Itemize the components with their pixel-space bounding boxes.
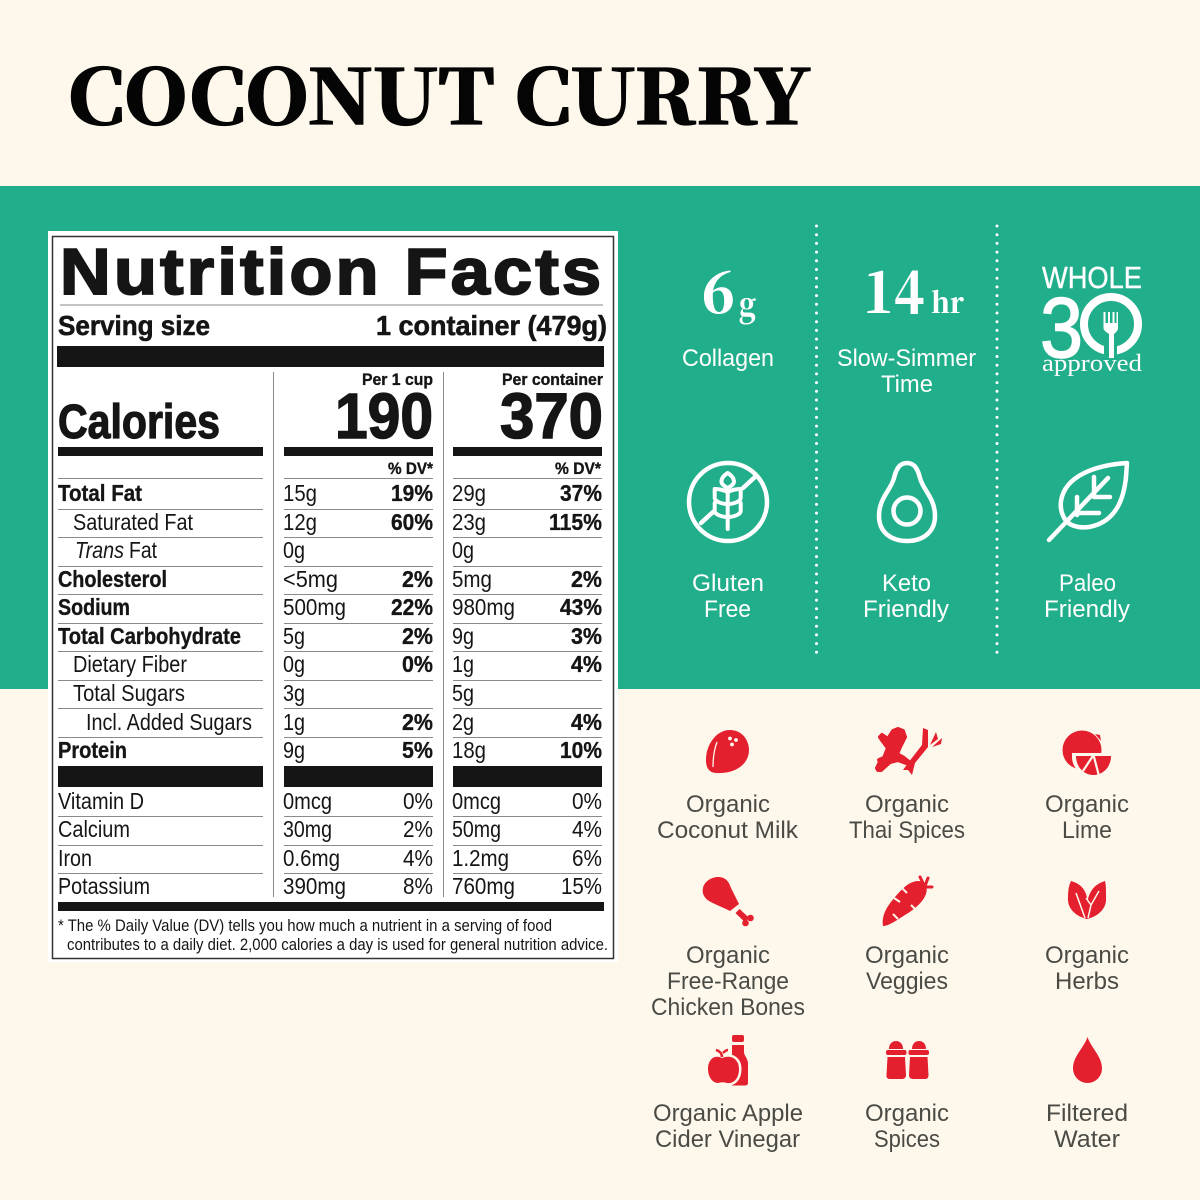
row: total carbohydrate: 9g: [452, 623, 474, 649]
heading: nutrition facts: Nutrition Facts: [60, 236, 601, 308]
calories row: Calories: [58, 396, 220, 449]
row: potassium: Potassium: [58, 873, 150, 899]
row: potassium: 760mg: [452, 873, 515, 899]
calories row: % DV*: [388, 459, 433, 478]
row: total sugars: 5g: [452, 680, 474, 706]
title: COCONUT CURRY: [68, 39, 811, 146]
keto friendly label: Friendly: [863, 596, 949, 623]
ingredient: herbs: Herbs: [1055, 968, 1119, 995]
row: potassium: 8%: [403, 873, 433, 899]
row: total fat: 19%: [391, 480, 433, 506]
row: cholesterol: [58, 566, 602, 592]
stat: 6g collagen: [682, 246, 774, 372]
row: total fat: 29g: [452, 480, 486, 506]
paleo friendly label: [1044, 570, 1130, 623]
row: sodium: Sodium: [58, 594, 130, 620]
row: calcium: Calcium: [58, 816, 130, 842]
ingredient: veggies: Organic: [865, 942, 949, 969]
row: trans fat: Fat: [129, 537, 157, 563]
row: calcium: [58, 816, 602, 842]
row: vitamin d: 0%: [403, 788, 433, 814]
ingredient: thai spices: [849, 791, 965, 844]
row: sodium: 980mg: [452, 594, 515, 620]
icon: herbs: [1068, 881, 1106, 919]
row: total fat: 37%: [560, 480, 602, 506]
ingredient: filtered water: [1046, 1100, 1128, 1153]
icon: water drop: [1073, 1037, 1102, 1083]
row: total carbohydrate: 3%: [571, 623, 602, 649]
gluten free label: [692, 570, 764, 623]
stat: 6g collagen: 6: [702, 246, 735, 330]
ingredient: spices: [865, 1100, 949, 1153]
keto friendly label: Keto: [882, 570, 931, 597]
ingredient: apple cider vinegar: Organic Apple: [653, 1100, 803, 1127]
keto friendly label: [863, 570, 949, 623]
icon: gluten free: [689, 463, 767, 541]
ingredient: veggies: [865, 942, 949, 995]
row: total fat: 15g: [283, 480, 317, 506]
ingredient: herbs: Organic: [1045, 942, 1129, 969]
row: cholesterol: Cholesterol: [58, 566, 167, 592]
teal band: [0, 186, 1200, 689]
ingredient: coconut milk: [657, 791, 799, 844]
calories row: 190: [335, 380, 433, 452]
stat: 14hr slow-simmer time: 14: [863, 246, 925, 330]
row: cholesterol: 2%: [402, 566, 433, 592]
ingredient: veggies: Veggies: [866, 968, 948, 995]
stat: 6g collagen: Collagen: [682, 345, 774, 372]
row: total carbohydrate: 2%: [402, 623, 433, 649]
row: sodium: 500mg: [283, 594, 346, 620]
row: total carbohydrate: [58, 623, 602, 649]
row: saturated fat: Saturated Fat: [73, 509, 193, 535]
icon: coconut: [706, 730, 749, 773]
ingredient: lime: [1045, 791, 1129, 844]
row: total fat: [58, 480, 602, 506]
icon: lime: [1062, 730, 1115, 778]
calories row: Per container: [502, 370, 603, 389]
ingredient: coconut milk: Coconut Milk: [657, 817, 799, 844]
icon: fork: [1104, 312, 1118, 358]
calories row: Per 1 cup: [362, 370, 433, 389]
paleo friendly label: Paleo: [1059, 570, 1116, 597]
gluten free label: Gluten: [692, 570, 764, 597]
row: vitamin d: 0mcg: [283, 788, 332, 814]
row: potassium: 390mg: [283, 873, 346, 899]
row: vitamin d: Vitamin D: [58, 788, 144, 814]
row: saturated fat: [73, 509, 602, 535]
row: saturated fat: 115%: [549, 509, 602, 535]
ingredient: herbs: [1045, 942, 1129, 995]
icon: avocado: [879, 463, 935, 541]
row: calcium: 50mg: [452, 816, 501, 842]
icon: chicken drumstick: [703, 877, 754, 926]
gluten free label: Free: [704, 596, 751, 623]
ingredient: apple cider vinegar: [653, 1100, 803, 1153]
row: cholesterol: 2%: [571, 566, 602, 592]
row: vitamin d: 0%: [572, 788, 602, 814]
row: protein: 5%: [402, 737, 433, 763]
badge: whole30 approved: approved: [1042, 351, 1142, 377]
row: trans fat: [75, 537, 474, 563]
row: added sugars: 1g: [283, 709, 305, 735]
row: sodium: 43%: [560, 594, 602, 620]
badge: whole30 approved: 3: [1040, 281, 1083, 376]
row: trans fat: 0g: [283, 537, 305, 563]
row: protein: 18g: [452, 737, 486, 763]
ingredient: lime: Organic: [1045, 791, 1129, 818]
stat: 14hr slow-simmer time: hr: [931, 282, 964, 322]
ingredient: filtered water: Filtered: [1046, 1100, 1128, 1127]
row: dietary fiber: 1g: [452, 651, 474, 677]
ingredient: lime: Lime: [1062, 817, 1112, 844]
row: dietary fiber: Dietary Fiber: [73, 651, 187, 677]
row: total sugars: Total Sugars: [73, 680, 185, 706]
ingredient: thai spices: Organic: [865, 791, 949, 818]
icon: salt and pepper shakers: [886, 1041, 929, 1079]
row: sodium: [58, 594, 602, 620]
row: added sugars: 4%: [571, 709, 602, 735]
row: iron: 1.2mg: [452, 845, 509, 871]
ingredient: spices: Spices: [874, 1126, 940, 1153]
row: protein: 9g: [283, 737, 305, 763]
row: saturated fat: 12g: [283, 509, 317, 535]
row: calcium: 2%: [403, 816, 433, 842]
ingredient: chicken bones: Free-Range: [667, 968, 789, 995]
serving size: [58, 310, 607, 341]
panel: nutrition facts label: [48, 231, 618, 962]
calories row: [58, 370, 603, 478]
badge: whole30 approved: WHOLE: [1042, 260, 1142, 295]
row: total carbohydrate: Total Carbohydrate: [58, 623, 241, 649]
row: protein: [58, 737, 602, 763]
row: iron: 6%: [572, 845, 602, 871]
footnote: * The % Daily Value (DV) tells you how much a nutrient in a serving of food: [58, 916, 552, 935]
row: added sugars: 2%: [402, 709, 433, 735]
row: dietary fiber: 4%: [571, 651, 602, 677]
icon: thai spices: [877, 728, 942, 775]
row: protein: 10%: [560, 737, 602, 763]
row: dietary fiber: [73, 651, 602, 677]
ingredient: apple cider vinegar: Cider Vinegar: [655, 1126, 800, 1153]
row: vitamin d: 0mcg: [452, 788, 501, 814]
calories row: % DV*: [555, 459, 601, 478]
icon: leaf: [1049, 463, 1127, 540]
stat: 14hr slow-simmer time: Slow-Simmer: [837, 345, 976, 372]
serving size: Serving size: [58, 310, 210, 341]
footnote: contributes to a daily diet. 2,000 calories a day is used for general nutrition advice.: [67, 935, 608, 954]
ingredient: chicken bones: Organic: [686, 942, 770, 969]
row: saturated fat: 23g: [452, 509, 486, 535]
row: iron: 0.6mg: [283, 845, 340, 871]
icon: carrot: [883, 877, 932, 926]
row: protein: Protein: [58, 737, 127, 763]
row: calcium: 4%: [572, 816, 602, 842]
row: added sugars: Incl. Added Sugars: [86, 709, 252, 735]
row: cholesterol: <5mg: [283, 566, 338, 592]
row: sodium: 22%: [391, 594, 433, 620]
row: total sugars: [73, 680, 474, 706]
row: total carbohydrate: 5g: [283, 623, 305, 649]
ingredient: coconut milk: Organic: [686, 791, 770, 818]
ingredient: chicken bones: Chicken Bones: [651, 994, 805, 1021]
stat: 14hr slow-simmer time: Time: [881, 371, 933, 398]
serving size: 1 container (479g): [376, 310, 607, 341]
row: vitamin d: [58, 788, 602, 814]
row: iron: Iron: [58, 845, 92, 871]
paleo friendly label: Friendly: [1044, 596, 1130, 623]
ingredient: spices: Organic: [865, 1100, 949, 1127]
row: total fat: Total Fat: [58, 480, 142, 506]
ingredient: filtered water: Water: [1054, 1126, 1120, 1153]
stat: 6g collagen: g: [739, 280, 756, 326]
stat: 14hr slow-simmer time: [837, 246, 976, 398]
row: potassium: 15%: [561, 873, 602, 899]
row: trans fat: 0g: [452, 537, 474, 563]
row: dietary fiber: 0%: [402, 651, 433, 677]
ingredient: chicken bones: [651, 942, 805, 1021]
calories row: 370: [500, 380, 603, 452]
ingredient: thai spices: Thai Spices: [849, 817, 965, 844]
row: saturated fat: 60%: [391, 509, 433, 535]
row: calcium: 30mg: [283, 816, 332, 842]
row: iron: [58, 845, 602, 871]
footnote: [58, 916, 608, 954]
row: iron: 4%: [403, 845, 433, 871]
row: added sugars: 2g: [452, 709, 474, 735]
row: dietary fiber: 0g: [283, 651, 305, 677]
row: cholesterol: 5mg: [452, 566, 492, 592]
row: added sugars: [86, 709, 602, 735]
row: total sugars: 3g: [283, 680, 305, 706]
row: trans fat: Trans: [75, 537, 124, 563]
row: potassium: [58, 873, 602, 899]
badge: whole30 approved: [1040, 260, 1142, 377]
icon: apple and vinegar bottle: [708, 1035, 748, 1086]
